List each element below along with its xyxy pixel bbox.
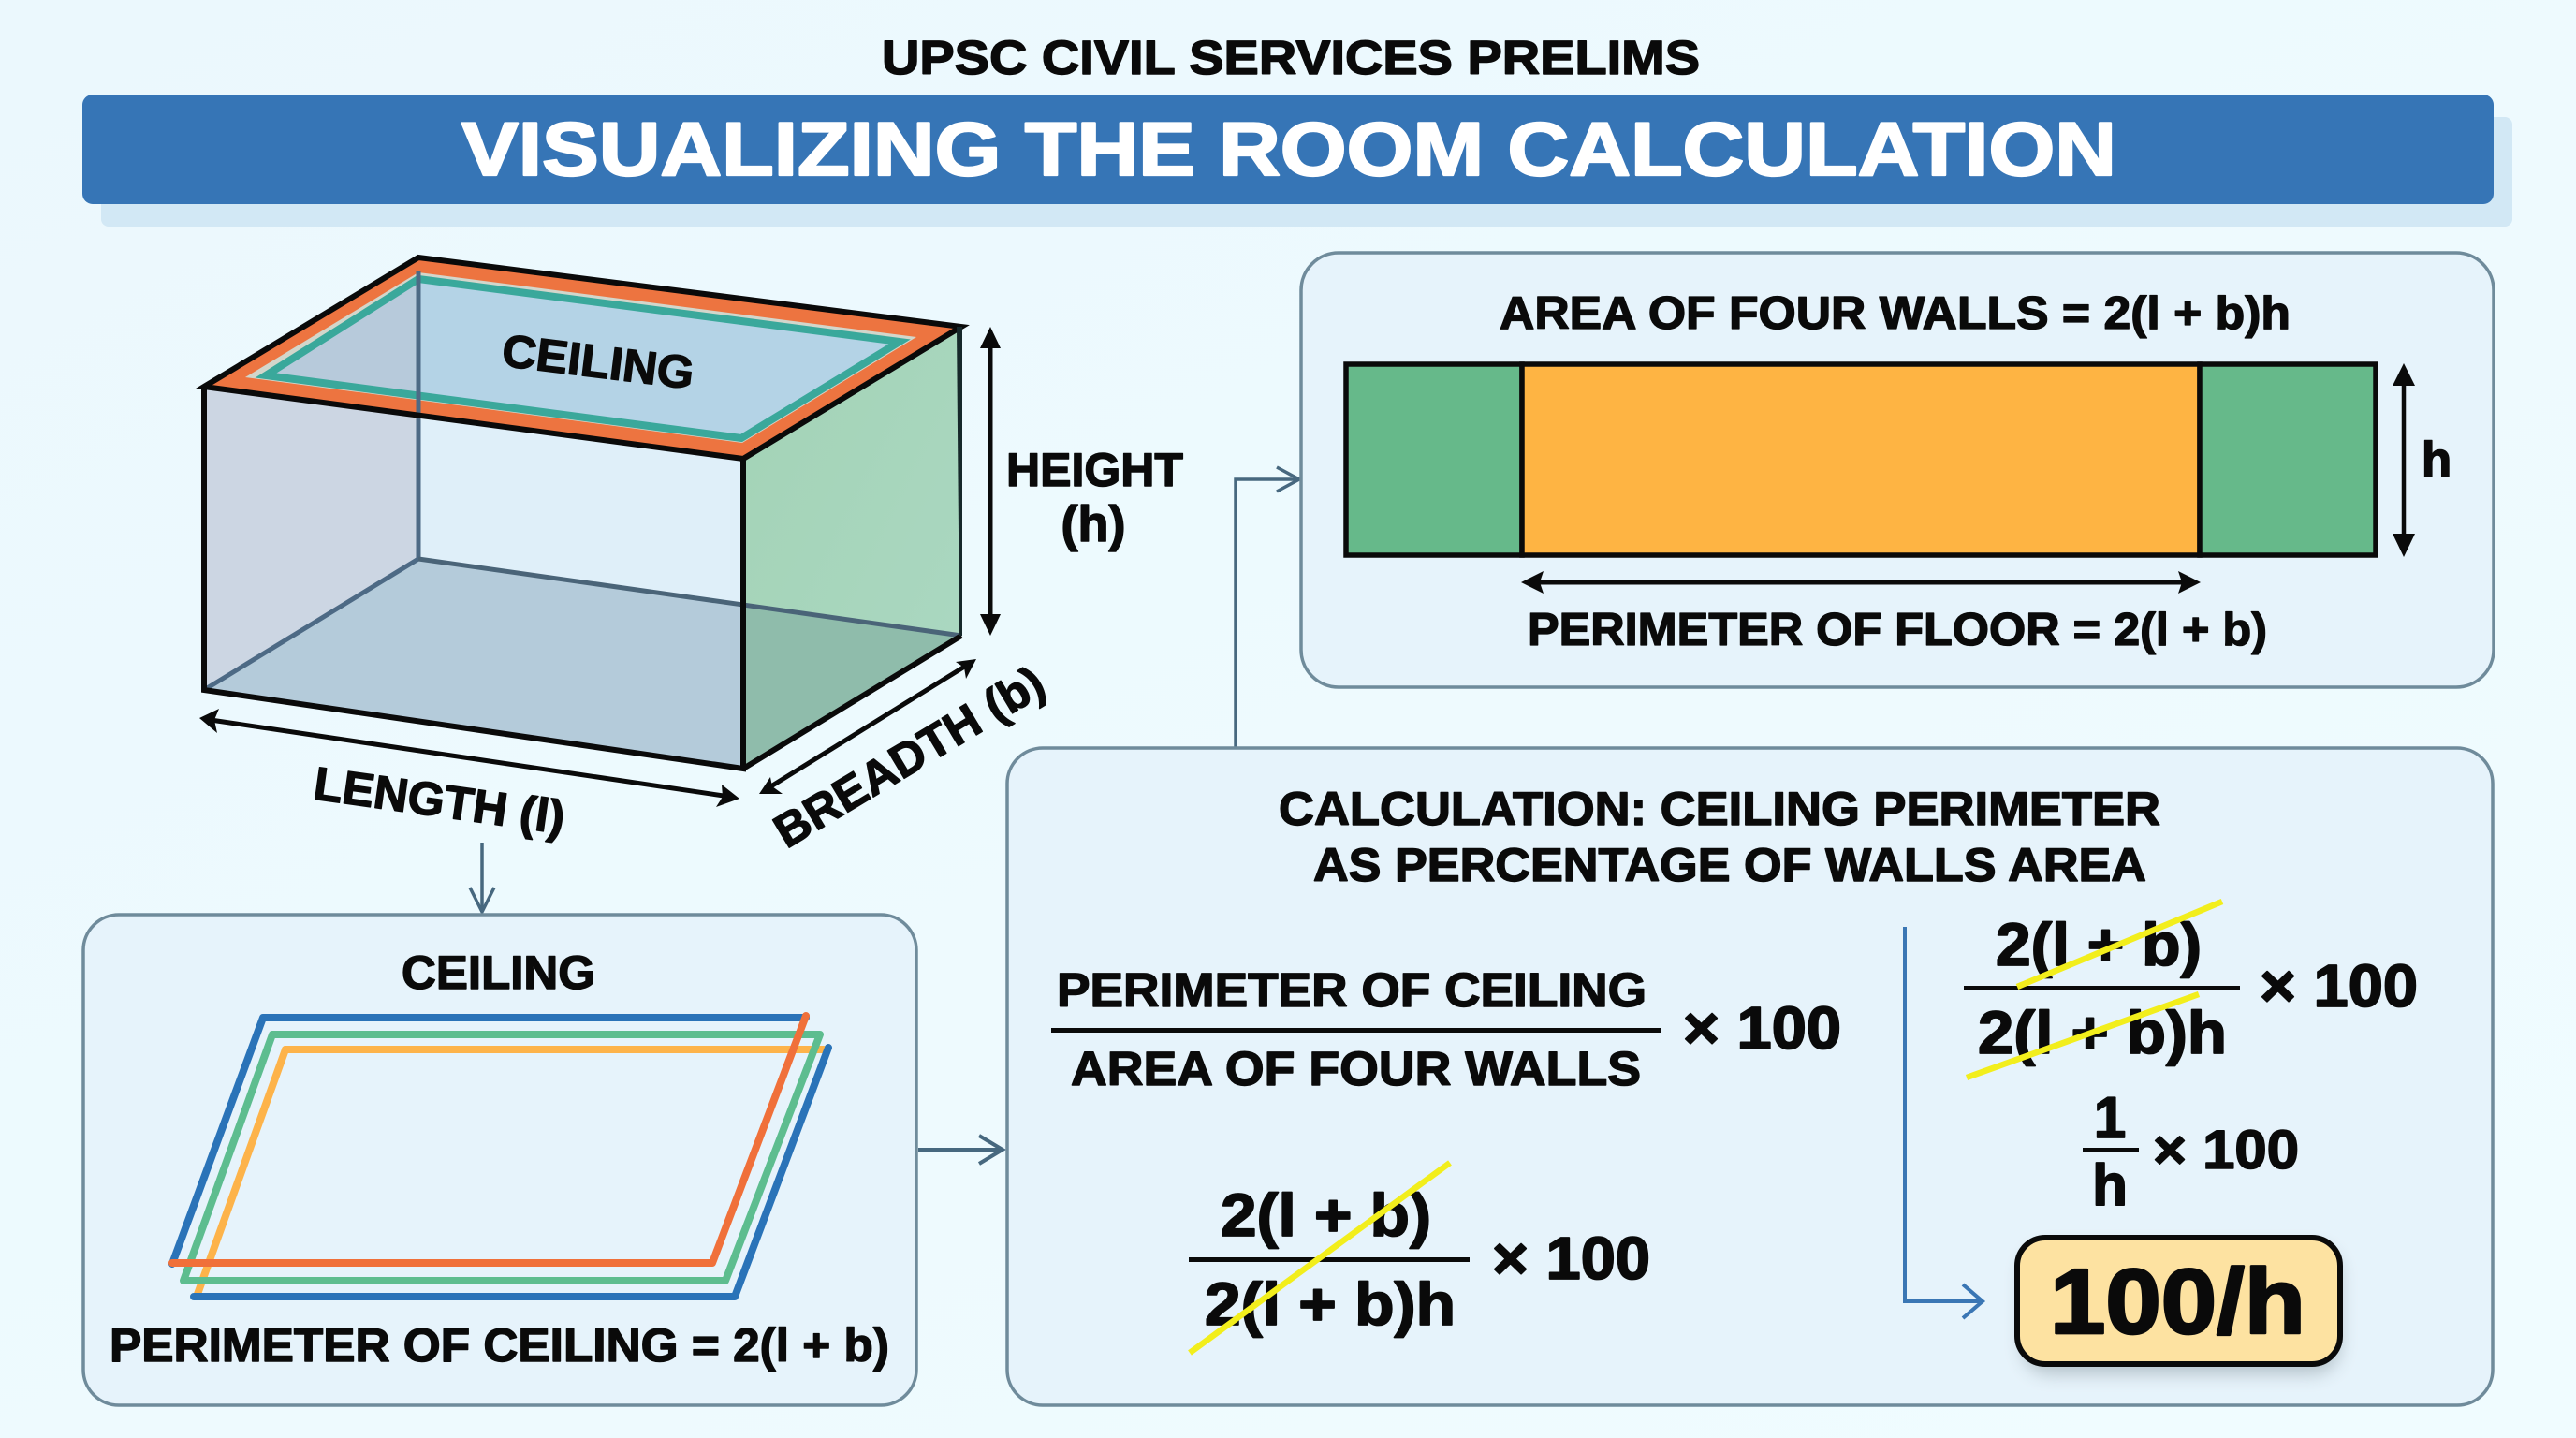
left wall xyxy=(204,257,418,690)
formula: word fraction: AREA OF FOUR WALLS xyxy=(1071,1042,1641,1095)
title banner xyxy=(82,95,2512,227)
layered perimeter outlines xyxy=(172,1016,828,1297)
unfolded walls strip xyxy=(1346,364,2376,555)
ceiling label: CEILING xyxy=(499,326,696,399)
formula: one over h: × 100 xyxy=(2153,1120,2299,1181)
panel: calculation xyxy=(1007,748,2493,1405)
height arrow xyxy=(980,327,1001,636)
height label xyxy=(1006,444,1183,552)
cancel strikes xyxy=(1967,902,2222,1078)
height label: HEIGHT xyxy=(1006,444,1183,496)
formula: word fraction: PERIMETER OF CEILING xyxy=(1057,963,1647,1017)
calculation heading xyxy=(1279,783,2160,891)
length arrow xyxy=(199,709,739,807)
calculation heading: CALCULATION: CEILING PERIMETER xyxy=(1279,783,2160,835)
title banner: VISUALIZING THE ROOM CALCULATION xyxy=(461,108,2116,192)
subtitle: UPSC CIVIL SERVICES PRELIMS xyxy=(882,31,1700,84)
hidden edges xyxy=(204,271,418,690)
arrow: calculation to walls panel xyxy=(1236,467,1299,747)
perimeter arrow xyxy=(1521,571,2201,594)
ceiling frame xyxy=(204,257,961,459)
breadth arrow xyxy=(759,659,976,794)
floor seen through right wall xyxy=(743,605,961,769)
formula: one over h: h xyxy=(2092,1153,2128,1218)
formula: one over h: 1 xyxy=(2094,1086,2126,1151)
ceiling heading: CEILING xyxy=(402,946,595,999)
formula: one over h xyxy=(2083,1086,2299,1218)
perimeter of floor label: PERIMETER OF FLOOR = 2(l + b) xyxy=(1528,605,2267,655)
walls heading: AREA OF FOUR WALLS = 2(l + b)h xyxy=(1500,288,2291,339)
back wall xyxy=(418,257,961,636)
formula: cancelled fraction: 2(l + b)h xyxy=(1978,999,2227,1066)
h arrow xyxy=(2393,363,2415,557)
perimeter of ceiling label: PERIMETER OF CEILING = 2(l + b) xyxy=(110,1319,889,1372)
right wall xyxy=(743,327,961,769)
formula: symbolic fraction: 2(l + b) xyxy=(1221,1181,1431,1249)
floor xyxy=(204,559,743,769)
panel: four walls xyxy=(1301,253,2494,687)
length label: LENGTH (l) xyxy=(311,757,568,844)
formula: symbolic fraction: × 100 xyxy=(1492,1225,1650,1292)
result badge xyxy=(2017,1238,2340,1374)
arrow: ceiling panel to calculation xyxy=(918,1136,1003,1164)
breadth label: BREADTH (b) xyxy=(765,655,1053,858)
formula: cancelled fraction: × 100 xyxy=(2260,952,2418,1020)
panel: ceiling xyxy=(83,915,916,1405)
3D room diagram xyxy=(204,257,962,769)
h label: h xyxy=(2422,433,2452,488)
formula: symbolic fraction xyxy=(1189,1163,1650,1353)
step divider arrow xyxy=(1905,927,1983,1318)
formula: word fraction xyxy=(1051,963,1841,1095)
cancel strike xyxy=(1190,1163,1450,1353)
outline edges xyxy=(204,257,961,459)
formula: cancelled fraction xyxy=(1964,902,2418,1078)
formula: word fraction: × 100 xyxy=(1683,994,1841,1062)
height label: (h) xyxy=(1061,496,1125,552)
calculation heading: AS PERCENTAGE OF WALLS AREA xyxy=(1313,839,2146,891)
result badge: 100/h xyxy=(2050,1250,2305,1353)
formula: symbolic fraction: 2(l + b)h xyxy=(1205,1270,1456,1338)
formula: cancelled fraction: 2(l + b) xyxy=(1996,911,2202,978)
arrow: room to ceiling panel xyxy=(470,843,494,912)
